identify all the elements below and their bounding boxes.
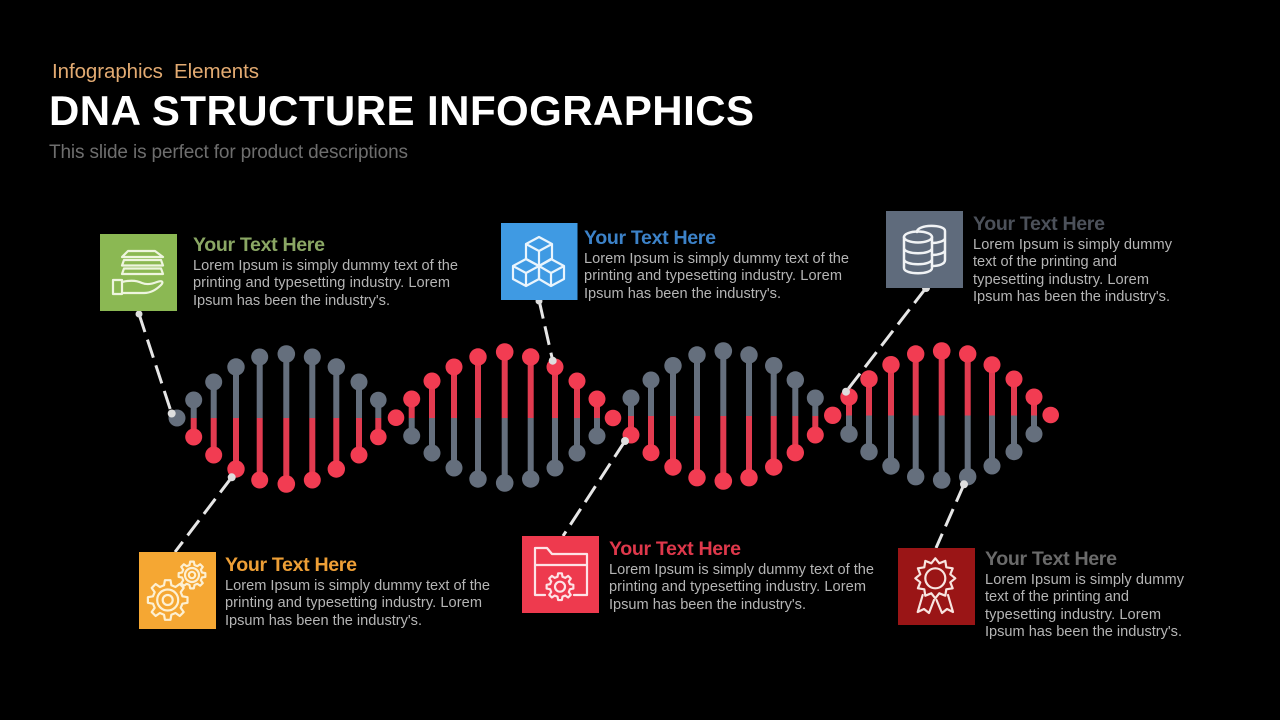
body text: Ipsum has been the industry's.	[584, 286, 781, 302]
body text: printing and typesetting industry. Lorem	[225, 595, 482, 611]
body text	[985, 572, 1185, 640]
icon: folder with gear	[522, 536, 599, 613]
body text: Ipsum has been the industry's.	[225, 613, 422, 629]
body text: Lorem Ipsum is simply dummy	[985, 572, 1185, 588]
body text: text of the printing and	[985, 589, 1129, 605]
body text: typesetting industry. Lorem	[973, 272, 1149, 288]
body text: Ipsum has been the industry's.	[985, 624, 1182, 640]
body text: typesetting industry. Lorem	[985, 607, 1161, 623]
helix section 3	[605, 342, 824, 490]
helix section 1	[168, 345, 387, 493]
helix section 4	[824, 342, 1059, 489]
body text	[225, 578, 490, 629]
body text: printing and typesetting industry. Lorem	[584, 268, 842, 284]
heading: Your Text Here	[973, 213, 1105, 235]
panel: green card	[100, 234, 458, 311]
body text: printing and typesetting industry. Lorem	[609, 579, 866, 595]
heading: Your Text Here	[609, 538, 741, 560]
body text: Lorem Ipsum is simply dummy text of the	[584, 251, 849, 267]
body text: text of the printing and	[973, 254, 1117, 270]
body text: Ipsum has been the industry's.	[973, 289, 1170, 305]
icon: database	[886, 211, 963, 288]
panel: red card	[522, 536, 874, 613]
connector: blue card to helix	[536, 298, 557, 365]
heading: Your Text Here	[985, 548, 1117, 570]
body text: Ipsum has been the industry's.	[609, 597, 806, 613]
panel: blue card	[501, 223, 849, 302]
icon: award ribbon	[898, 548, 975, 625]
icon: cubes	[501, 223, 578, 300]
body text	[973, 237, 1173, 305]
icon: gears	[139, 552, 216, 629]
connector: dark red card to helix	[936, 480, 968, 548]
connector: slate card to helix	[842, 284, 930, 396]
panel: dark red card	[898, 548, 1185, 640]
DNA helix	[168, 342, 1059, 493]
helix section 2	[388, 343, 606, 492]
body text	[584, 251, 849, 302]
body text: Lorem Ipsum is simply dummy	[973, 237, 1173, 253]
heading: Your Text Here	[193, 234, 325, 256]
connector: orange card to helix	[175, 473, 236, 552]
body text: Ipsum has been the industry's.	[193, 293, 390, 309]
eyebrow heading: Infographics Elements	[52, 60, 259, 83]
body text: Lorem Ipsum is simply dummy text of the	[225, 578, 490, 594]
heading: Your Text Here	[225, 554, 357, 576]
connector: red card to helix	[563, 437, 629, 536]
heading: Your Text Here	[584, 227, 716, 249]
connector: green card to helix	[136, 310, 176, 418]
body text	[609, 562, 874, 613]
panel: orange card	[139, 552, 490, 629]
icon: layers on hand	[100, 234, 177, 311]
panel: slate card	[886, 211, 1173, 305]
body text: printing and typesetting industry. Lorem	[193, 275, 450, 291]
body text: Lorem Ipsum is simply dummy text of the	[609, 562, 874, 578]
body text	[193, 258, 458, 309]
title: DNA STRUCTURE INFOGRAPHICS	[49, 87, 754, 134]
body text: Lorem Ipsum is simply dummy text of the	[193, 258, 458, 274]
subtitle: This slide is perfect for product descriptions	[49, 142, 408, 163]
